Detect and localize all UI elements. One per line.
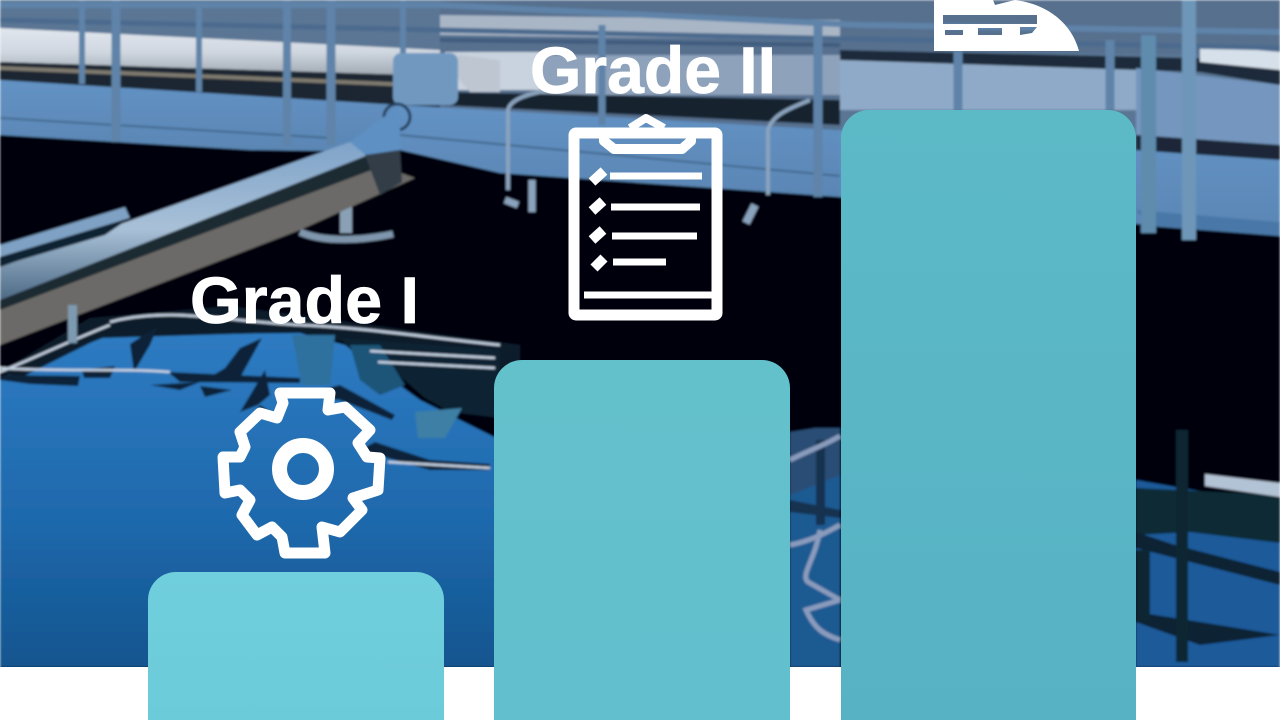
hanging hoses and brackets xyxy=(505,92,810,223)
diagonal pipes xyxy=(0,105,415,345)
icon: clipboard checklist xyxy=(574,118,717,315)
label: Grade II: Grade II xyxy=(530,33,776,107)
deck top mixed tones xyxy=(440,0,1280,160)
walkway fascia: left, middle, right xyxy=(0,80,400,152)
railings xyxy=(0,0,1280,197)
junction housing xyxy=(384,53,500,130)
bar: Grade I xyxy=(148,572,444,720)
dark deck edge, left xyxy=(0,62,440,108)
water reflections on left xyxy=(0,306,520,470)
icon: gear xyxy=(223,393,380,553)
water at lower right xyxy=(1136,430,1280,667)
water column between bars xyxy=(790,428,840,667)
label: Grade I: Grade I xyxy=(190,263,419,337)
bar: Grade II xyxy=(494,360,790,720)
walkway deck back xyxy=(0,0,1280,160)
blue water surface xyxy=(0,333,500,667)
white footer band xyxy=(0,667,1280,720)
icon: cropped treatment tank xyxy=(934,0,1079,51)
bar: Grade III xyxy=(841,110,1136,720)
light deck slab, left xyxy=(0,28,440,76)
